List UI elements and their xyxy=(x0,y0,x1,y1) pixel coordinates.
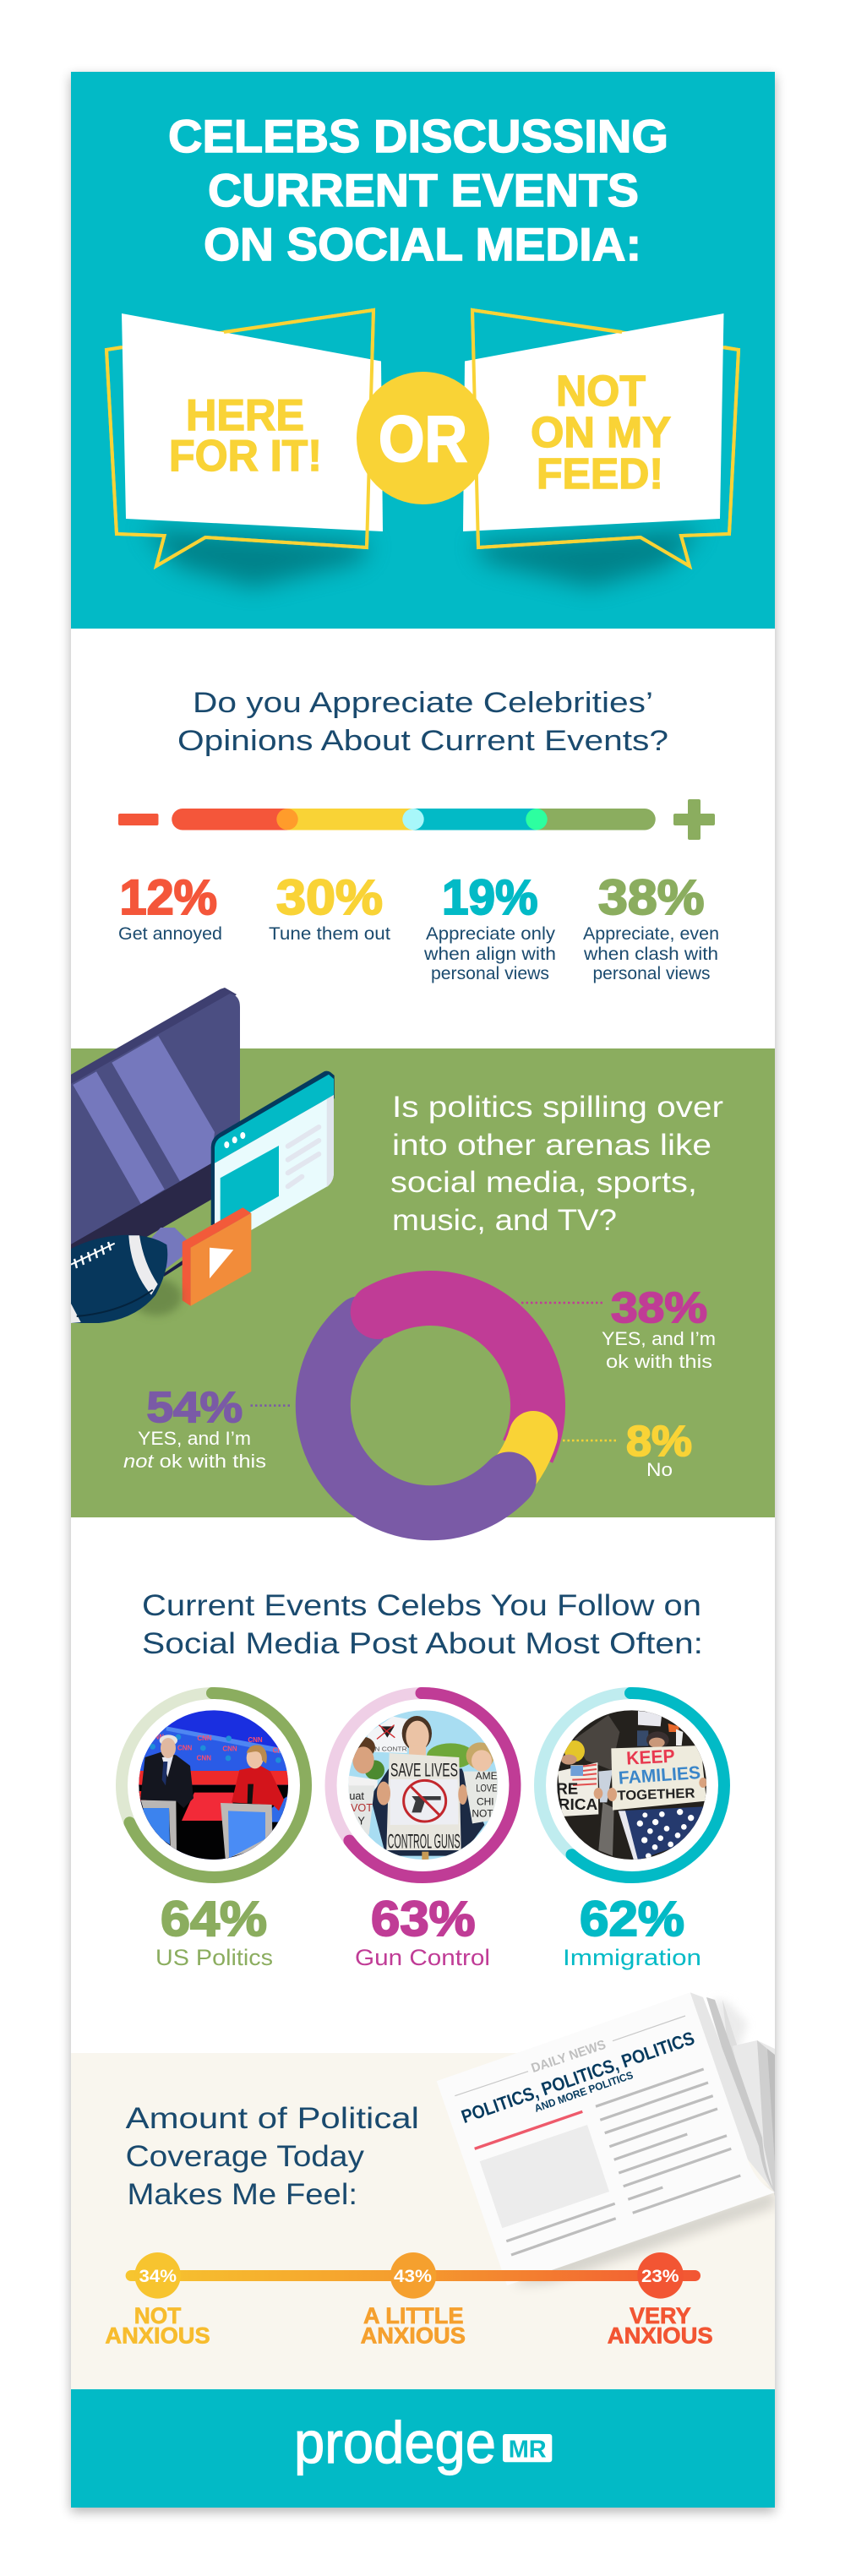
panel: appreciate opinions xyxy=(118,687,719,983)
label: very anxious: VERY xyxy=(630,2303,691,2328)
newspaper headline: POLITICS, POLITICS, POLITICS xyxy=(459,2028,697,2127)
stat: 19%: Appreciate only xyxy=(426,924,556,944)
question text: into other arenas like xyxy=(392,1129,711,1162)
donut chart xyxy=(323,1299,538,1513)
heading: Do you Appreciate Celebrities’ xyxy=(193,687,653,719)
stat: 38% xyxy=(583,870,719,983)
stat: 38%: 38% xyxy=(598,870,705,925)
callout: 54%: not ok with this xyxy=(123,1451,266,1472)
label: a little anxious: A LITTLE xyxy=(363,2303,463,2328)
label: not anxious: NOT xyxy=(134,2303,182,2328)
speech bubble: here for it: HERE xyxy=(186,391,304,440)
opinion scale bar xyxy=(118,799,715,840)
photo: protest against guns: uat xyxy=(349,1790,364,1802)
photo: debate stage xyxy=(139,1710,288,1860)
stat: 38%: when clash with xyxy=(583,945,718,964)
stat: 12%: 12% xyxy=(120,870,217,925)
stat: 19%: when align with xyxy=(423,945,556,964)
stat: 19% xyxy=(423,870,556,983)
illustration: tv, browser window, football, play button xyxy=(63,988,335,1323)
photo: protest against guns: VOT xyxy=(351,1802,373,1814)
progress ring xyxy=(540,1693,724,1877)
callout: 8% xyxy=(563,1417,692,1480)
label: Immigration xyxy=(563,1945,701,1970)
photo: immigration protest: RICA xyxy=(559,1795,597,1813)
label: a little anxious xyxy=(361,2303,466,2349)
heading: Coverage Today xyxy=(126,2140,365,2173)
photo: immigration protest: RE xyxy=(556,1779,578,1797)
photo: debate stage: CNN xyxy=(150,1734,164,1741)
photo: protest against guns: CONTROL GUNS xyxy=(388,1830,461,1853)
topic: us politics xyxy=(122,1693,306,1970)
title: ON SOCIAL MEDIA: xyxy=(204,218,641,270)
stat: 12%: Get annoyed xyxy=(118,924,222,944)
marker: 43% xyxy=(390,2252,436,2299)
label: very anxious xyxy=(608,2303,713,2349)
question text: social media, sports, xyxy=(390,1166,697,1199)
callout: 54%: 54% xyxy=(147,1383,243,1431)
stat: 30%: Tune them out xyxy=(269,924,390,944)
photo: protest against guns xyxy=(348,1710,498,1860)
panel: footer xyxy=(71,2389,775,2508)
title xyxy=(168,110,668,270)
heading: Current Events Celebs You Follow on xyxy=(142,1589,701,1622)
photo: protest against guns: AME xyxy=(476,1770,498,1782)
heading: Opinions About Current Events? xyxy=(177,725,668,757)
panel: political coverage anxiety xyxy=(71,1992,775,2389)
speech bubble: not on my feed: ON MY xyxy=(531,408,671,456)
photo: protest against guns: LOVE xyxy=(476,1783,497,1794)
photo: debate stage: CNN xyxy=(222,1745,237,1753)
heading xyxy=(177,687,668,757)
speech bubble: not on my feed: FEED! xyxy=(537,449,663,498)
progress ring xyxy=(331,1693,515,1877)
stat: 19%: 19% xyxy=(442,870,537,925)
icon: newspaper xyxy=(437,1992,775,2285)
stat: 62% xyxy=(580,1892,684,1947)
question text xyxy=(390,1091,723,1237)
question text: music, and TV? xyxy=(392,1204,617,1237)
photo: immigration protest xyxy=(557,1710,706,1860)
callout: 38% xyxy=(521,1283,716,1372)
panel: header xyxy=(71,72,775,629)
marker: 23% xyxy=(637,2252,684,2299)
photo: immigration protest: FAMILIES xyxy=(618,1762,701,1789)
heading xyxy=(142,1589,703,1660)
label: a little anxious: ANXIOUS xyxy=(361,2323,466,2349)
marker: 34% xyxy=(134,2252,181,2299)
stat: 19%: personal views xyxy=(431,964,549,983)
callout: 8%: No xyxy=(646,1459,673,1480)
heading: Social Media Post About Most Often: xyxy=(142,1627,703,1660)
icon: browser window xyxy=(211,1071,335,1234)
label: very anxious: ANXIOUS xyxy=(608,2323,713,2349)
photo: debate stage: CNN xyxy=(197,1735,212,1742)
callout: 54%: YES, and I’m xyxy=(138,1428,251,1449)
callout: 38%: ok with this xyxy=(606,1351,712,1372)
topic: immigration xyxy=(540,1693,724,1970)
title: CURRENT EVENTS xyxy=(208,164,639,216)
label: not anxious xyxy=(105,2303,210,2349)
photo: protest against guns: N CONTR xyxy=(374,1745,407,1753)
photo: protest against guns: CHI xyxy=(477,1796,494,1808)
newspaper masthead: DAILY NEWS xyxy=(530,2038,608,2076)
heading xyxy=(126,2102,419,2211)
stat: 38%: Appreciate, even xyxy=(583,924,719,944)
speech bubble: here for it: FOR IT! xyxy=(169,432,322,481)
icon: football xyxy=(71,1235,182,1323)
stat: 38%: personal views xyxy=(593,964,710,983)
heading: Makes Me Feel: xyxy=(127,2178,357,2211)
callout: 54% xyxy=(123,1383,291,1472)
photo: protest against guns: SAVE LIVES xyxy=(390,1760,458,1781)
icon: tv xyxy=(63,988,240,1285)
label: Gun Control xyxy=(355,1945,490,1970)
callout: 8%: 8% xyxy=(626,1417,692,1465)
callout: 38%: YES, and I’m xyxy=(602,1328,716,1349)
anxiety scale xyxy=(126,2252,701,2299)
or badge: OR xyxy=(379,403,467,476)
question text: Is politics spilling over xyxy=(392,1091,723,1124)
photo: debate stage: CNN xyxy=(177,1744,193,1751)
photo: protest against guns: Y xyxy=(357,1815,365,1827)
marker: 34%: 34% xyxy=(139,2267,177,2286)
heading: Amount of Political xyxy=(126,2102,419,2135)
logo: MR xyxy=(509,2436,547,2463)
stat: 30%: 30% xyxy=(276,870,383,925)
title: CELEBS DISCUSSING xyxy=(168,110,668,162)
photo: debate stage: CNN xyxy=(197,1754,211,1762)
label: US Politics xyxy=(155,1945,273,1970)
marker: 43%: 43% xyxy=(394,2267,432,2286)
logo: prodege xyxy=(294,2410,496,2475)
topic: gun control xyxy=(331,1693,515,1970)
speech bubble: here for it xyxy=(106,310,383,566)
panel: current events topics xyxy=(122,1589,724,1970)
panel: politics spilling over xyxy=(63,988,775,1517)
stat: 64% xyxy=(161,1892,267,1947)
or badge xyxy=(357,372,489,504)
marker: 23%: 23% xyxy=(641,2267,679,2286)
speech bubble: not on my feed: NOT xyxy=(556,367,646,415)
photo: protest against guns: NOT Y xyxy=(472,1808,503,1820)
photo: debate stage: CNN xyxy=(273,1747,287,1755)
newspaper subhead: AND MORE POLITICS xyxy=(533,2069,635,2115)
stat: 63% xyxy=(371,1892,475,1947)
callout: 38%: 38% xyxy=(611,1283,707,1332)
speech bubble: not on my feed xyxy=(463,310,739,566)
progress ring xyxy=(122,1693,306,1877)
stat: 30% xyxy=(269,870,390,944)
photo: immigration protest: KEEP xyxy=(626,1745,675,1769)
photo: debate stage: CNN xyxy=(248,1736,263,1744)
photo: immigration protest: TOGETHER xyxy=(617,1786,695,1804)
icon: play button xyxy=(183,1207,251,1306)
label: not anxious: ANXIOUS xyxy=(105,2323,210,2349)
